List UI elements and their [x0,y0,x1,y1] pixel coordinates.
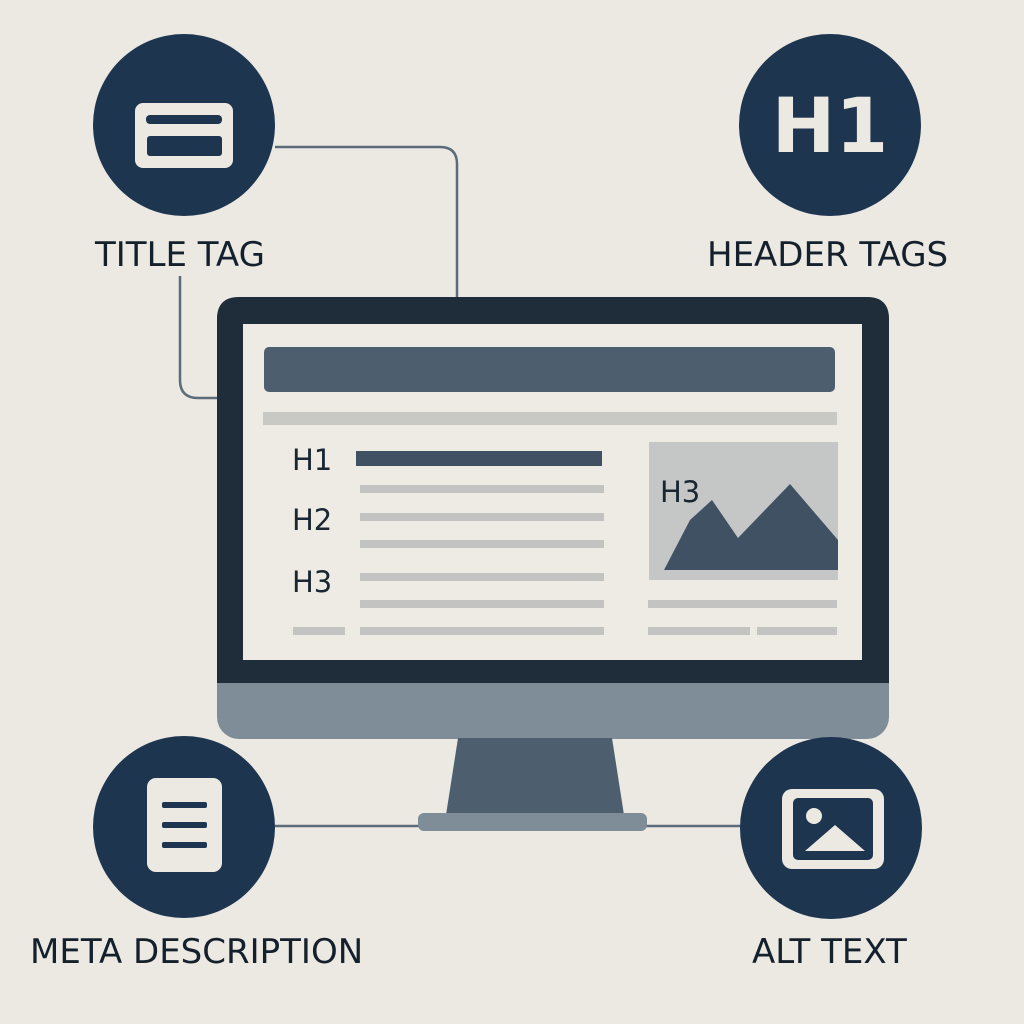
icon: title tag [93,34,275,216]
label: title tag: TITLE TAG [94,235,265,275]
label: meta description: META DESCRIPTION [30,932,363,972]
label: alt text: ALT TEXT [752,932,907,972]
screen: headings list [292,443,604,635]
icon: header tags [739,34,921,216]
icon: alt text [740,737,922,919]
screen: image block [648,442,838,635]
stand [446,738,624,815]
connector: title tag label to monitor side [180,276,218,398]
icon: meta description [93,736,275,918]
connector: title tag to monitor top [275,147,457,298]
icon: header tags: H1 [772,81,888,170]
screen: image block: H3 [660,475,700,509]
monitor [217,297,889,831]
label: header tags: HEADER TAGS [707,235,948,275]
screen: headings list: H2 [292,503,332,537]
screen: headings list: H3 [292,565,332,599]
connector: stand to alt text [646,680,828,826]
screen: title bar [264,347,835,392]
screen: headings list: H1 [292,443,332,477]
connector: meta description to stand [275,825,420,827]
